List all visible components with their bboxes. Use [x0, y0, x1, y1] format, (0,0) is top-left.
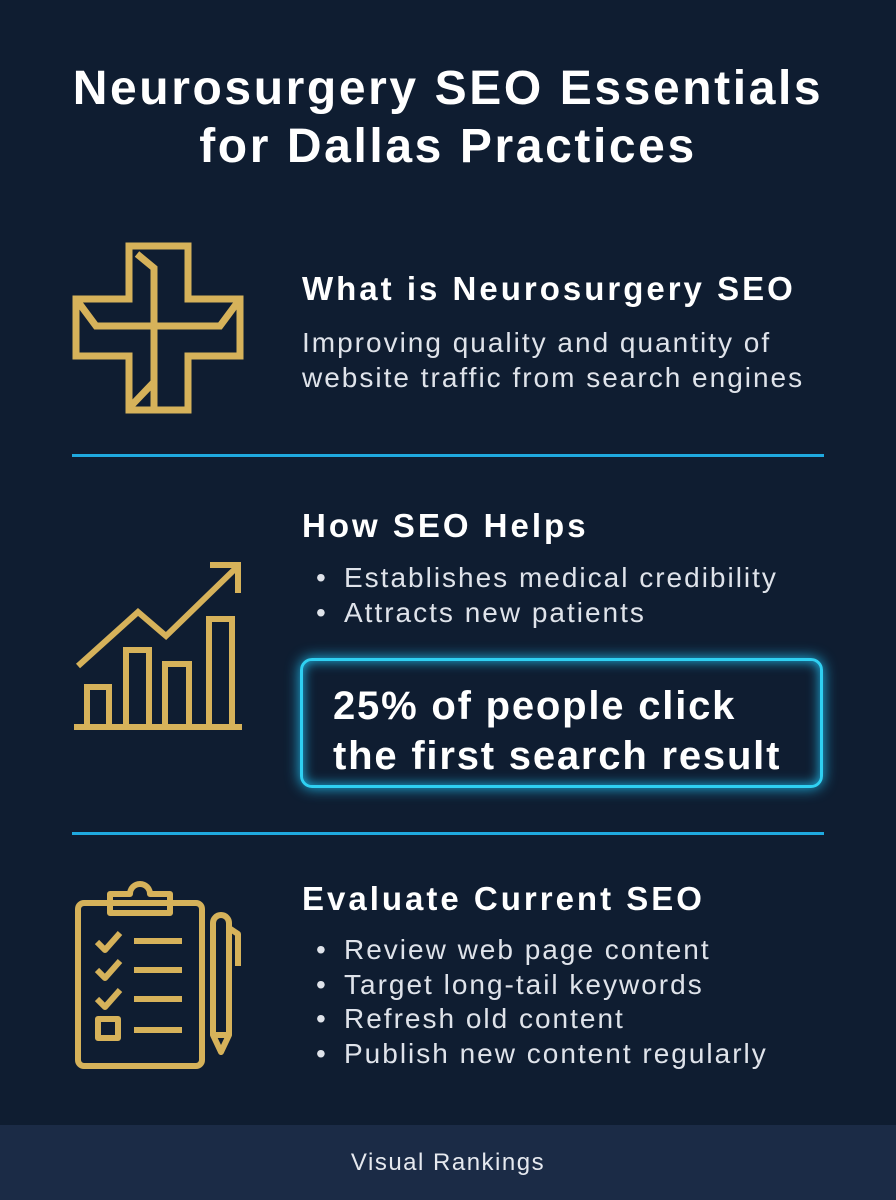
- list: benefits: Establishes medical credibility: [344, 562, 778, 593]
- footer: [0, 1125, 896, 1200]
- heading: what is: What is Neurosurgery SEO: [302, 270, 796, 307]
- heading: evaluate: Evaluate Current SEO: [302, 880, 705, 917]
- list: evaluation steps: Refresh old content: [344, 1003, 625, 1034]
- heading: how SEO helps: How SEO Helps: [302, 507, 589, 544]
- list: evaluation steps: Publish new content regularly: [344, 1038, 768, 1068]
- icon: growth chart: [74, 562, 242, 730]
- list: benefits: [317, 562, 778, 628]
- text: definition: [302, 327, 804, 393]
- list: evaluation steps: [317, 934, 768, 1069]
- text: definition: Improving quality and quantity of: [302, 327, 771, 358]
- icon: medical cross: [72, 242, 244, 414]
- list: evaluation steps: Target long-tail keywords: [344, 968, 704, 1000]
- callout: statistic: 25% of people click: [333, 684, 736, 728]
- callout: statistic: the first search result: [333, 734, 781, 778]
- footer: Visual Rankings: [351, 1149, 545, 1176]
- list: evaluation steps: Review web page content: [344, 934, 711, 965]
- text: definition: website traffic from search engines: [302, 362, 804, 393]
- list: benefits: Attracts new patients: [344, 597, 646, 628]
- title: for Dallas Practices: [199, 120, 697, 173]
- title: [73, 62, 823, 173]
- icon: clipboard: [75, 881, 241, 1069]
- callout: statistic: [300, 658, 823, 788]
- title: Neurosurgery SEO Essentials: [73, 62, 823, 115]
